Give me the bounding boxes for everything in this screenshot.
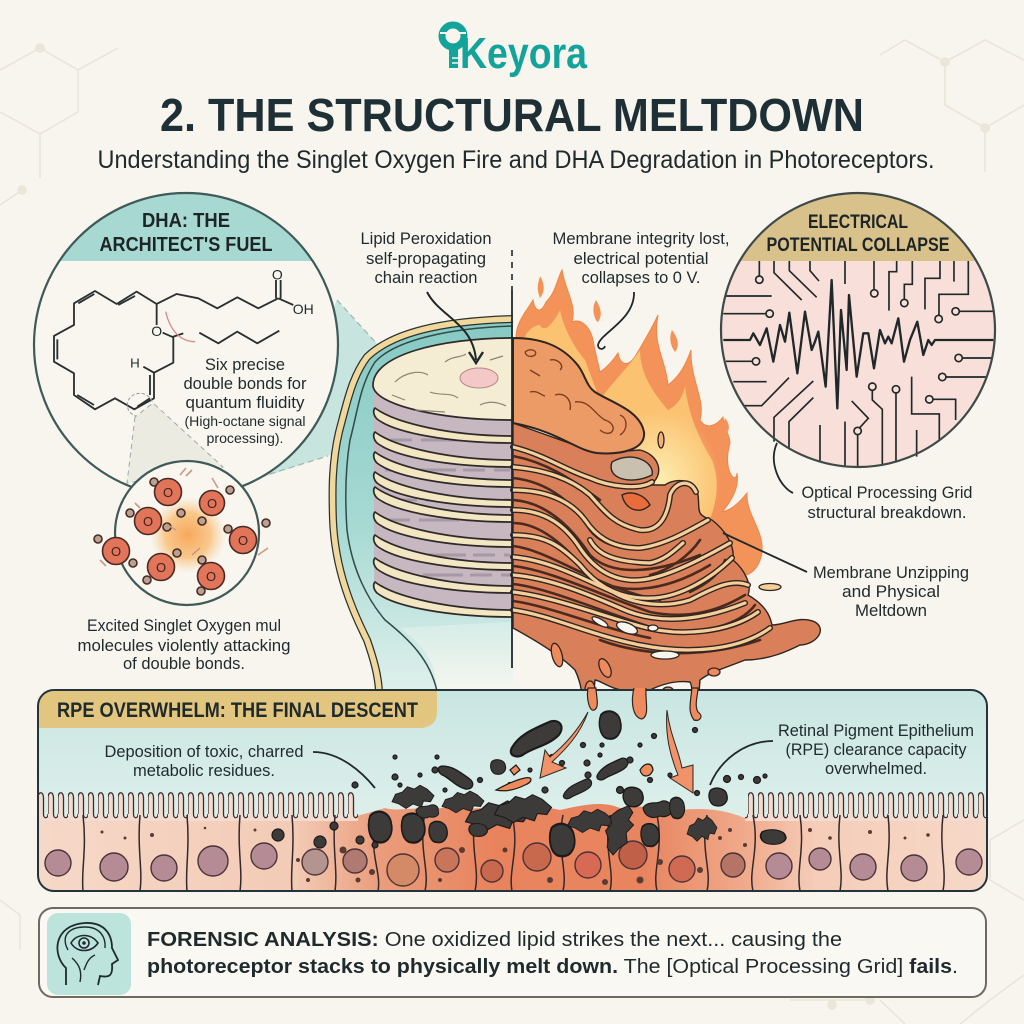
leader: RPE clearance	[710, 741, 773, 785]
RPE heading: RPE OVERWHELM: THE FINAL DESCENT	[57, 699, 418, 722]
panel: DHA circle	[30, 190, 340, 497]
label: six double bonds: Six precise	[205, 356, 285, 374]
label: deposition	[104, 743, 304, 780]
label: membrane integrity: Membrane integrity lost,	[552, 230, 730, 248]
label: deposition: Deposition of toxic, charred	[104, 743, 304, 761]
DHA skeletal molecule: H	[130, 355, 140, 370]
DHA skeletal molecule	[54, 266, 314, 417]
label: six double bonds	[184, 356, 307, 446]
melted photoreceptor stack	[513, 338, 820, 724]
DHA skeletal molecule: OH	[293, 301, 314, 317]
panel: electrical potential circle	[715, 190, 1005, 467]
title: 2. THE STRUCTURAL MELTDOWN	[160, 89, 864, 141]
dark folds between layers	[513, 456, 760, 653]
forensic text: photoreceptor stacks to physically melt down. The [Optical Processing Grid] fails.	[147, 955, 958, 978]
zoom cone to stack	[255, 300, 378, 480]
label: singlet oxygen: Excited Singlet Oxygen mul	[87, 617, 281, 635]
photoreceptor chamber	[331, 316, 513, 691]
panel: singlet oxygen circle	[94, 461, 270, 605]
lipid peroxidation spot	[460, 368, 498, 388]
label: singlet oxygen: molecules violently attacking	[78, 637, 290, 655]
oxygen molecules: O	[143, 514, 153, 529]
label: optical grid: Optical Processing Grid	[802, 484, 972, 502]
waveform	[723, 280, 993, 408]
DHA skeletal molecule: O	[272, 266, 283, 282]
DHA header band	[60, 194, 312, 261]
subtitle: Understanding the Singlet Oxygen Fire and DHA Degradation in Photoreceptors.	[98, 146, 934, 174]
label: RPE clearance: (RPE) clearance capacity	[786, 741, 967, 759]
arrow: lipid peroxidation	[427, 292, 483, 363]
leader: deposition	[313, 752, 375, 788]
label: membrane unzipping	[813, 564, 969, 620]
label: optical grid	[802, 484, 972, 522]
oxygen molecules: O	[163, 485, 173, 500]
label: membrane integrity: collapses to 0 V.	[582, 269, 700, 287]
leader: optical grid	[774, 443, 793, 493]
label: lipid peroxidation: chain reaction	[374, 269, 478, 287]
oxygen molecules: O	[207, 496, 217, 511]
label: deposition: metabolic residues.	[133, 762, 275, 780]
label: membrane integrity	[552, 230, 730, 287]
oxygen molecules: O	[206, 569, 216, 584]
explosion glow	[150, 497, 226, 573]
divider: center line	[511, 250, 513, 290]
label: lipid peroxidation: self-propagating	[366, 250, 486, 268]
left photoreceptor stack	[373, 338, 513, 617]
label: membrane integrity: electrical potential	[574, 250, 708, 268]
circuit traces	[723, 261, 993, 467]
label: singlet oxygen: of double bonds.	[123, 655, 245, 673]
electrical header band	[741, 194, 975, 261]
charred debris	[272, 711, 786, 858]
icon tile: brain head	[47, 913, 131, 995]
RPE header tab	[38, 690, 437, 728]
nuclei	[45, 841, 982, 886]
holes and drips	[591, 432, 781, 659]
flames	[516, 270, 762, 576]
zoom connector dashes	[127, 403, 223, 483]
falling drips across panel	[587, 688, 701, 720]
label: membrane unzipping: and Physical	[842, 583, 940, 601]
panel: forensic analysis	[39, 908, 986, 997]
label: six double bonds: double bonds for	[184, 375, 307, 393]
DHA heading	[100, 210, 272, 256]
label: lipid peroxidation	[360, 230, 492, 287]
electrical heading: POTENTIAL COLLAPSE	[766, 234, 950, 256]
label: optical grid: structural breakdown.	[808, 504, 966, 522]
RPE cell row	[38, 791, 987, 891]
label: RPE clearance: Retinal Pigment Epithelium	[778, 722, 974, 740]
label: singlet oxygen	[78, 617, 290, 673]
DHA heading: DHA: THE	[142, 210, 230, 232]
forensic text	[147, 928, 958, 978]
DHA skeletal molecule: O	[151, 323, 162, 339]
label: membrane unzipping: Membrane Unzipping	[813, 564, 969, 582]
electrical heading	[766, 211, 950, 256]
arrow: falling left	[540, 712, 588, 778]
forensic text: FORENSIC ANALYSIS: One oxidized lipid strikes the next... causing the	[147, 928, 842, 951]
label: six double bonds: processing).	[206, 430, 284, 446]
leader: membrane integrity	[598, 292, 634, 349]
leader: membrane unzipping	[723, 533, 807, 572]
oxygen molecules	[94, 468, 270, 595]
cell specks	[100, 827, 930, 885]
panel: RPE overwhelm	[38, 690, 987, 891]
label: RPE clearance: overwhelmed.	[825, 760, 927, 778]
oxygen molecules: O	[156, 560, 166, 575]
label: lipid peroxidation: Lipid Peroxidation	[360, 230, 492, 248]
label: RPE clearance	[778, 722, 974, 778]
label: six double bonds: quantum fluidity	[186, 394, 305, 412]
oxygen molecules: O	[238, 533, 248, 548]
label: six double bonds: (High-octane signal	[184, 413, 306, 429]
logo: Keyora: Keyora	[460, 29, 587, 78]
DHA heading: ARCHITECT'S FUEL	[100, 234, 272, 256]
arrow: falling right	[667, 710, 693, 793]
electrical heading: ELECTRICAL	[808, 211, 908, 233]
top melting lobe	[513, 338, 644, 453]
oxygen molecules: O	[111, 544, 121, 559]
label: membrane unzipping: Meltdown	[855, 602, 927, 620]
